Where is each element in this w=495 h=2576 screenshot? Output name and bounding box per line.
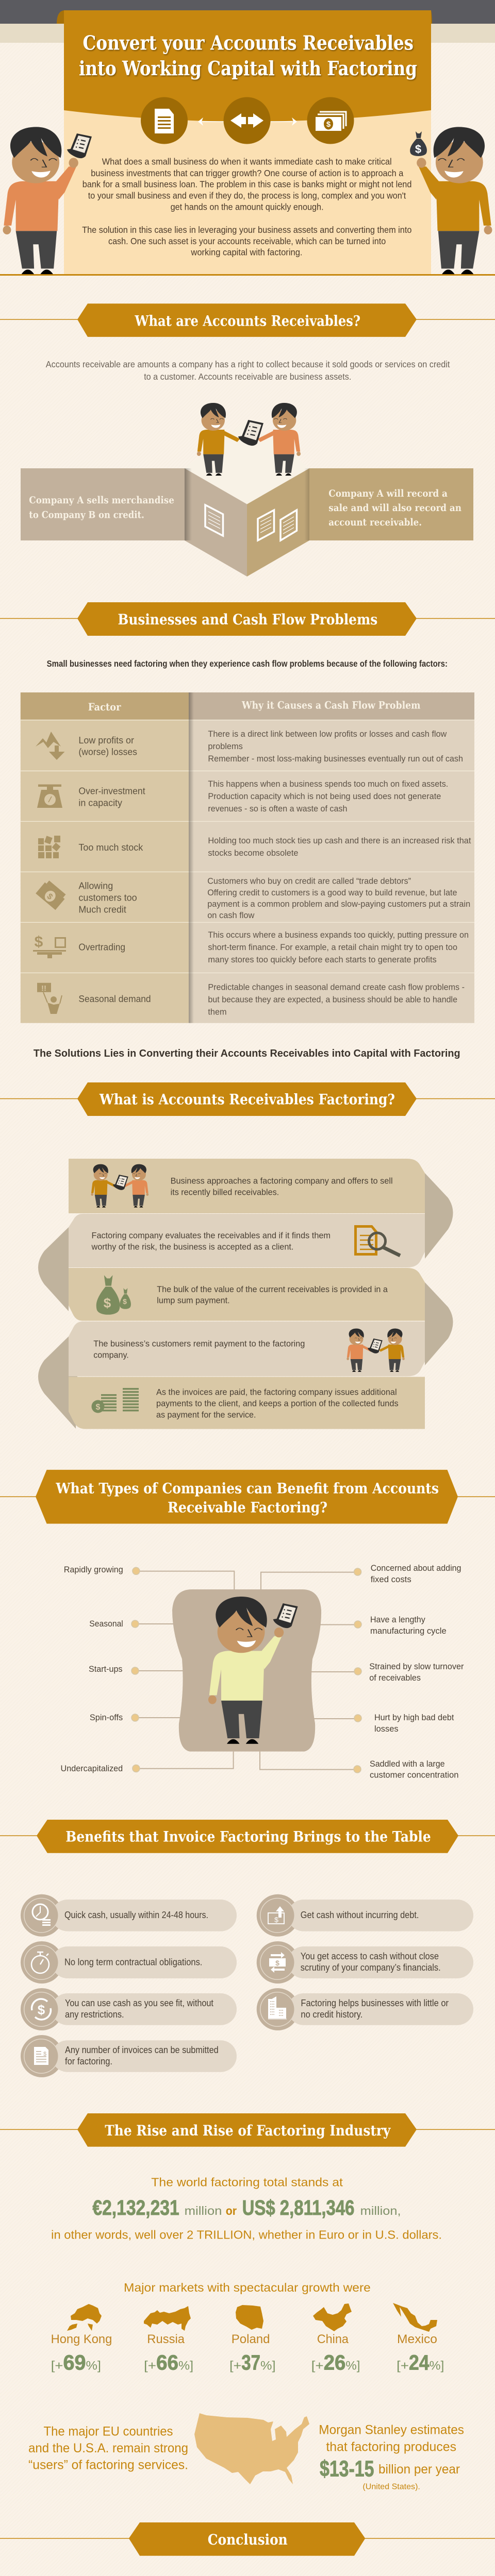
intro text: cash. One such asset is your accounts receivable, which can be turned into [108, 236, 386, 246]
left labels [61, 1565, 123, 1773]
icon: coin stacks: $ [96, 1403, 101, 1412]
growth percentages: %] [260, 2359, 275, 2373]
step 5: payments to the client, and keeps a portion of the collected funds [156, 1399, 399, 1409]
growth percentages: %] [86, 2359, 101, 2373]
stat: world factoring total: €2,132,231 [92, 2196, 179, 2219]
step 3 [69, 1268, 425, 1321]
growth percentages: [+ [51, 2359, 63, 2373]
country names: China [317, 2332, 349, 2346]
icon: money bags: $ [123, 1297, 127, 1306]
map: Hong Kong [67, 2304, 102, 2331]
icon: capacity scale [37, 784, 62, 808]
growth percentages [51, 2351, 444, 2375]
factor labels: Allowing [78, 881, 113, 891]
icon: seasonal sign holder [37, 983, 62, 1014]
growth percentages: 24 [409, 2351, 430, 2375]
country names [51, 2332, 437, 2346]
factor explanations: Production capacity which is not being used does not generate [208, 791, 441, 801]
text: Company A records: Company A will record a [328, 488, 448, 499]
right labels: Concerned about adding [371, 1563, 461, 1573]
heading: Conclusion: Conclusion [208, 2531, 288, 2548]
factor labels [78, 735, 151, 1004]
factor explanations: but because they are expected, a business should be able to handle [208, 995, 457, 1005]
icon: coin stacks [92, 1388, 139, 1413]
benefit: no long term contract: No long term contractual obligations. [64, 1957, 202, 1967]
factor explanations: problems [208, 741, 243, 751]
factor explanations: Customers who buy on credit are called “trade debtors” [207, 876, 411, 886]
step 5: As the invoices are paid, the factoring company issues additional [156, 1387, 397, 1397]
intro text: The solution in this case lies in leveraging your business assets and converting them into [82, 225, 411, 235]
panel: benefits list [21, 1894, 473, 2077]
step 5 [69, 1377, 425, 1429]
benefit: quick cash [21, 1894, 237, 1937]
right labels: of receivables [369, 1673, 421, 1683]
growth percentages: [+ [229, 2359, 241, 2373]
heading: What is Accounts Receivables Factoring? [0, 1082, 495, 1116]
stat: Morgan Stanley estimate: (United States). [362, 2483, 420, 2492]
icon: document under magnifier [354, 1225, 400, 1256]
heading: Conclusion [0, 2522, 495, 2556]
right labels: Have a lengthy [370, 1615, 425, 1624]
stat: world factoring total: The world factoring total stands at [151, 2176, 343, 2189]
character: left man with invoice [3, 127, 92, 274]
map: Poland [236, 2305, 263, 2330]
factor labels: Over-investment [78, 786, 145, 796]
text: Company A records: account receivable. [328, 517, 422, 528]
factor explanations: Predictable changes in seasonal demand create cash flow problems - [208, 982, 465, 992]
header bands [0, 0, 495, 276]
map: Russia [144, 2306, 191, 2331]
text: EU and USA users: The major EU countries [43, 2425, 173, 2439]
step 2: worthy of the risk, the business is accepted as a client. [91, 1242, 293, 1251]
icon: overtrading balance: $ [35, 934, 43, 951]
growth percentages: [+ [311, 2359, 324, 2373]
right labels: Strained by slow turnover [369, 1662, 464, 1671]
factor explanations: Remember - most loss-making businesses eventually run out of cash [208, 754, 463, 764]
text: Company A sells [29, 495, 174, 520]
heading: What is Accounts Receivables Factoring?: What is Accounts Receivables Factoring? [99, 1091, 395, 1108]
table header: Why it Causes a Cash Flow Problem [241, 699, 421, 711]
text: definition: Accounts receivable are amounts a company has a right to collect because it sold goods or services on credit [46, 359, 450, 369]
stat: world factoring total: million, [360, 2204, 401, 2217]
intro text: bank for a small business loan. The problem in this case is banks might or might not lend [82, 179, 411, 190]
heading: The Rise and Rise of Factoring Industry: The Rise and Rise of Factoring Industry [105, 2122, 391, 2139]
panel: factoring process ribbon [38, 1159, 453, 1429]
benefit: any number of invoices [21, 2035, 237, 2077]
icon: seasonal sign holder: !! [41, 984, 46, 993]
left labels: Seasonal [89, 1619, 123, 1629]
left labels: Undercapitalized [61, 1764, 123, 1773]
map: Mexico [393, 2303, 437, 2332]
growth percentages: 37 [241, 2351, 260, 2375]
factor labels: Too much stock [78, 842, 143, 853]
text: Company A sells: Company A sells merchandise [29, 495, 174, 506]
growth percentages: %] [345, 2359, 360, 2373]
step 4: The business’s customers remit payment to the factoring [93, 1339, 305, 1349]
character: right man with money bag: $ [415, 143, 421, 156]
intro text: get hands on the amount quickly enough. [171, 202, 324, 212]
heading: Businesses and Cash Flow Problems [0, 602, 495, 636]
benefit: any number of invoices: $ [43, 2051, 46, 2057]
left labels: Rapidly growing [64, 1565, 123, 1574]
factor explanations [207, 729, 471, 1017]
right labels: Saddled with a large [370, 1759, 445, 1769]
step 1: its recently billed receivables. [171, 1188, 279, 1197]
map: United States [194, 2413, 309, 2484]
intro text: business investments that can trigger growth? One course of action is to approach a [91, 168, 404, 178]
benefit: no long term contract [21, 1941, 237, 1984]
stat: world factoring total: million [185, 2204, 222, 2217]
step 4: company. [93, 1350, 129, 1360]
benefit: no credit history: no credit history. [301, 2009, 362, 2020]
icon: overtrading balance [33, 934, 66, 958]
icon: money bags [96, 1275, 131, 1315]
right labels: customer concentration [370, 1770, 459, 1780]
benefit: no credit history: Factoring helps businesses with little or [301, 1998, 449, 2008]
character: man in yellow [208, 1597, 298, 1744]
benefit: any number of invoices: for factoring. [65, 2056, 112, 2066]
text: Company A records [328, 488, 461, 528]
heading: Businesses and Cash Flow Problems: Businesses and Cash Flow Problems [118, 611, 377, 628]
benefit: use cash freely [21, 1988, 237, 2030]
stat: world factoring total: in other words, well over 2 TRILLION, whether in Euro or in U.S. dollars. [51, 2228, 442, 2241]
title: Convert your Accounts Receivables [82, 31, 414, 54]
factor explanations: This occurs where a business expands too quickly, putting pressure on [208, 930, 469, 940]
central seat shape [172, 1589, 321, 1752]
heading: Benefits that Invoice Factoring Brings: Benefits that Invoice Factoring Brings to the Table [65, 1828, 431, 1845]
factor explanations: revenues - so is often a waste of cash [208, 804, 347, 814]
right labels: fixed costs [371, 1574, 411, 1584]
factor explanations: There is a direct link between low profits or losses and cash flow [208, 729, 447, 739]
icon: invoice document [141, 97, 188, 144]
factor explanations: on cash flow [207, 910, 255, 920]
step 5: as payment for the service. [156, 1410, 256, 1419]
text: the solution statement: The Solutions Lies in Converting their Accounts Receivables into Capital with Factoring [34, 1048, 460, 1059]
right labels: losses [374, 1724, 399, 1734]
text: major markets heading: Major markets with spectacular growth were [124, 2281, 371, 2294]
icon: exchange arrows [224, 97, 270, 144]
factor explanations: This happens when a business spends too much on fixed assets. [208, 779, 448, 789]
text: EU and USA users: “users” of factoring services. [28, 2458, 188, 2472]
stat: Morgan Stanley estimate [319, 2423, 464, 2492]
factor labels: (worse) losses [78, 747, 137, 757]
stat: world factoring total: or [226, 2204, 237, 2217]
text: Company A records: sale and will also record an [328, 502, 461, 514]
icon: cash [307, 97, 354, 144]
heading: What Types of Companies can Benefit: Receivable Factoring? [168, 1499, 327, 1516]
step 3: lump sum payment. [157, 1296, 230, 1306]
benefit: use cash freely: any restrictions. [65, 2009, 124, 2020]
factor explanations: Holding too much stock ties up cash and there is an increased risk that [208, 836, 471, 845]
icon: falling profits [36, 732, 65, 760]
title [79, 31, 417, 80]
intro text: to your small business and even if they do, the process is long, complex and you won't [88, 191, 406, 201]
arrows between hero icons [198, 117, 297, 126]
right labels: Hurt by high bad debt [374, 1713, 454, 1722]
heading: What are Accounts Receivables? [0, 303, 495, 337]
benefit: no debt: Get cash without incurring debt. [301, 1910, 419, 1920]
growth percentages: %] [178, 2359, 193, 2373]
stat: world factoring total: US$ 2,811,346 [242, 2196, 355, 2219]
character: right man with money bag [410, 127, 492, 274]
icon: one document [205, 505, 223, 536]
factor labels: Seasonal demand [78, 994, 151, 1004]
benefit: quick cash: Quick cash, usually within 24-48 hours. [64, 1910, 208, 1920]
factor labels: customers too [78, 893, 137, 903]
step 3: The bulk of the value of the current receivables is provided in a [157, 1284, 388, 1294]
text: definition [46, 359, 450, 382]
table: cash flow factors [21, 692, 474, 1023]
panel: folded company example [21, 403, 473, 577]
text: Company A sells: to Company B on credit. [29, 509, 144, 520]
stat: world factoring total [51, 2176, 442, 2241]
country names: Poland [232, 2332, 270, 2346]
heading: The Rise and Rise of Factoring Industry [0, 2113, 495, 2147]
benefit: no debt [257, 1894, 473, 1937]
benefit: no financial scrutiny: $ [275, 1959, 279, 1967]
benefit: no credit history [257, 1988, 473, 2030]
factor labels: in capacity [78, 798, 122, 808]
heading: What are Accounts Receivables?: What are Accounts Receivables? [135, 312, 360, 330]
benefit: use cash freely: You can use cash as you see fit, without [65, 1998, 213, 2008]
stat: Morgan Stanley estimate: billion per year [378, 2462, 460, 2477]
panel: growth markets [51, 2303, 444, 2375]
step 1 [69, 1159, 425, 1213]
left labels: Spin-offs [90, 1713, 123, 1722]
characters: two men exchanging invoice [197, 403, 301, 476]
step 1: Business approaches a factoring company and offers to sell [171, 1176, 393, 1186]
intro text: What does a small business do when it wants immediate cash to make critical [102, 157, 392, 167]
map: China [313, 2303, 352, 2331]
heading: What Types of Companies can Benefit: What Types of Companies can Benefit from Accounts [56, 1480, 439, 1497]
factor explanations: stocks become obsolete [208, 848, 298, 858]
growth percentages: 69 [63, 2351, 86, 2375]
benefit: any number of invoices: Any number of invoices can be submitted [65, 2045, 219, 2055]
stat: Morgan Stanley estimate: Morgan Stanley estimates [319, 2423, 464, 2437]
icon: banknotes on credit [36, 879, 68, 910]
stat: Morgan Stanley estimate: $13-15 [320, 2456, 374, 2482]
icon: cash: $ [326, 120, 331, 129]
intro text [82, 157, 411, 258]
benefit: no financial scrutiny [257, 1941, 473, 1984]
title: into Working Capital with Factoring [79, 57, 417, 80]
country names: Hong Kong [51, 2332, 112, 2346]
heading: What Types of Companies can Benefit [0, 1470, 495, 1524]
connector dots [131, 1567, 361, 1773]
right labels [369, 1563, 464, 1780]
growth percentages: [+ [144, 2359, 156, 2373]
left labels: Start-ups [89, 1664, 123, 1674]
icon: two documents [258, 510, 297, 540]
icon: banknotes on credit: $ [45, 892, 54, 902]
icon: money bags: $ [104, 1295, 111, 1311]
step 2 [69, 1214, 425, 1267]
text: EU and USA users [28, 2425, 188, 2472]
factor explanations: many stores too quickly before each starts to generate profits [208, 955, 437, 964]
factor explanations: short-term finance. For example, a retail chain might try to open too [208, 942, 457, 952]
factor labels: Low profits or [78, 735, 134, 745]
factor explanations: payment is a common problem and slow-paying customers put a strain [207, 899, 470, 909]
right labels: manufacturing cycle [370, 1626, 447, 1636]
benefit: no financial scrutiny: You get access to cash without close [301, 1951, 439, 1961]
benefit: use cash freely: $ [38, 2002, 45, 2018]
table header [88, 699, 421, 713]
benefit: no debt: $ [274, 1916, 278, 1924]
text: definition: to a customer. Accounts receivable are business assets. [144, 371, 351, 382]
connector lines [135, 1571, 358, 1770]
factor labels: Much credit [78, 905, 126, 915]
table header: Factor [88, 701, 121, 713]
benefit: no financial scrutiny: scrutiny of your company’s financials. [301, 1962, 441, 1973]
icon: stock blocks [38, 836, 60, 858]
growth percentages: 66 [156, 2351, 178, 2375]
heading: Benefits that Invoice Factoring Brings [0, 1820, 495, 1853]
country names: Russia [147, 2332, 185, 2346]
step 4 [69, 1321, 425, 1376]
text: EU and USA users: and the U.S.A. remain strong [28, 2441, 188, 2455]
panel: hero [57, 10, 432, 274]
stat: Morgan Stanley estimate: that factoring produces [326, 2439, 456, 2454]
panel: company types diagram [61, 1563, 464, 1780]
intro text: working capital with factoring. [190, 247, 302, 258]
step 2: Factoring company evaluates the receivables and if it finds them [92, 1231, 331, 1241]
growth percentages: %] [430, 2359, 444, 2373]
growth percentages: [+ [397, 2359, 409, 2373]
growth percentages: 26 [324, 2351, 345, 2375]
factor labels: Overtrading [78, 942, 125, 953]
factor explanations: them [208, 1007, 227, 1017]
country names: Mexico [397, 2332, 437, 2346]
factor explanations: Offering credit to customers is a good way to build revenue, but late [207, 888, 457, 897]
